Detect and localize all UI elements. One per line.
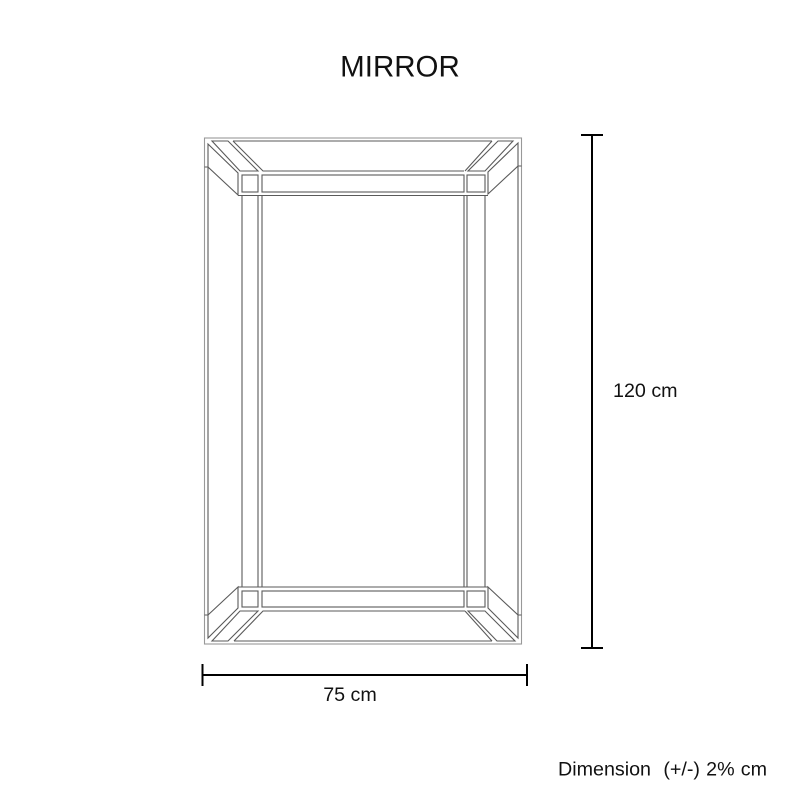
- title: MIRROR: [340, 50, 460, 84]
- mirror frame drawing: [204, 138, 522, 644]
- height dimension line: [581, 135, 603, 648]
- width dimension line: [202, 664, 527, 686]
- bottom left corner: [208, 587, 492, 641]
- bottom rail panel: [262, 591, 464, 607]
- height label: 120 cm: [613, 380, 678, 402]
- top left corner: [208, 141, 492, 195]
- outer frame: [204, 138, 522, 644]
- top right corner: [465, 141, 518, 194]
- frame side rails: [204, 166, 522, 615]
- bottom right corner: [465, 587, 518, 641]
- tolerance note: Dimension (+/-) 2% cm: [558, 758, 767, 780]
- width label: 75 cm: [323, 684, 377, 706]
- top rail panel: [262, 175, 464, 192]
